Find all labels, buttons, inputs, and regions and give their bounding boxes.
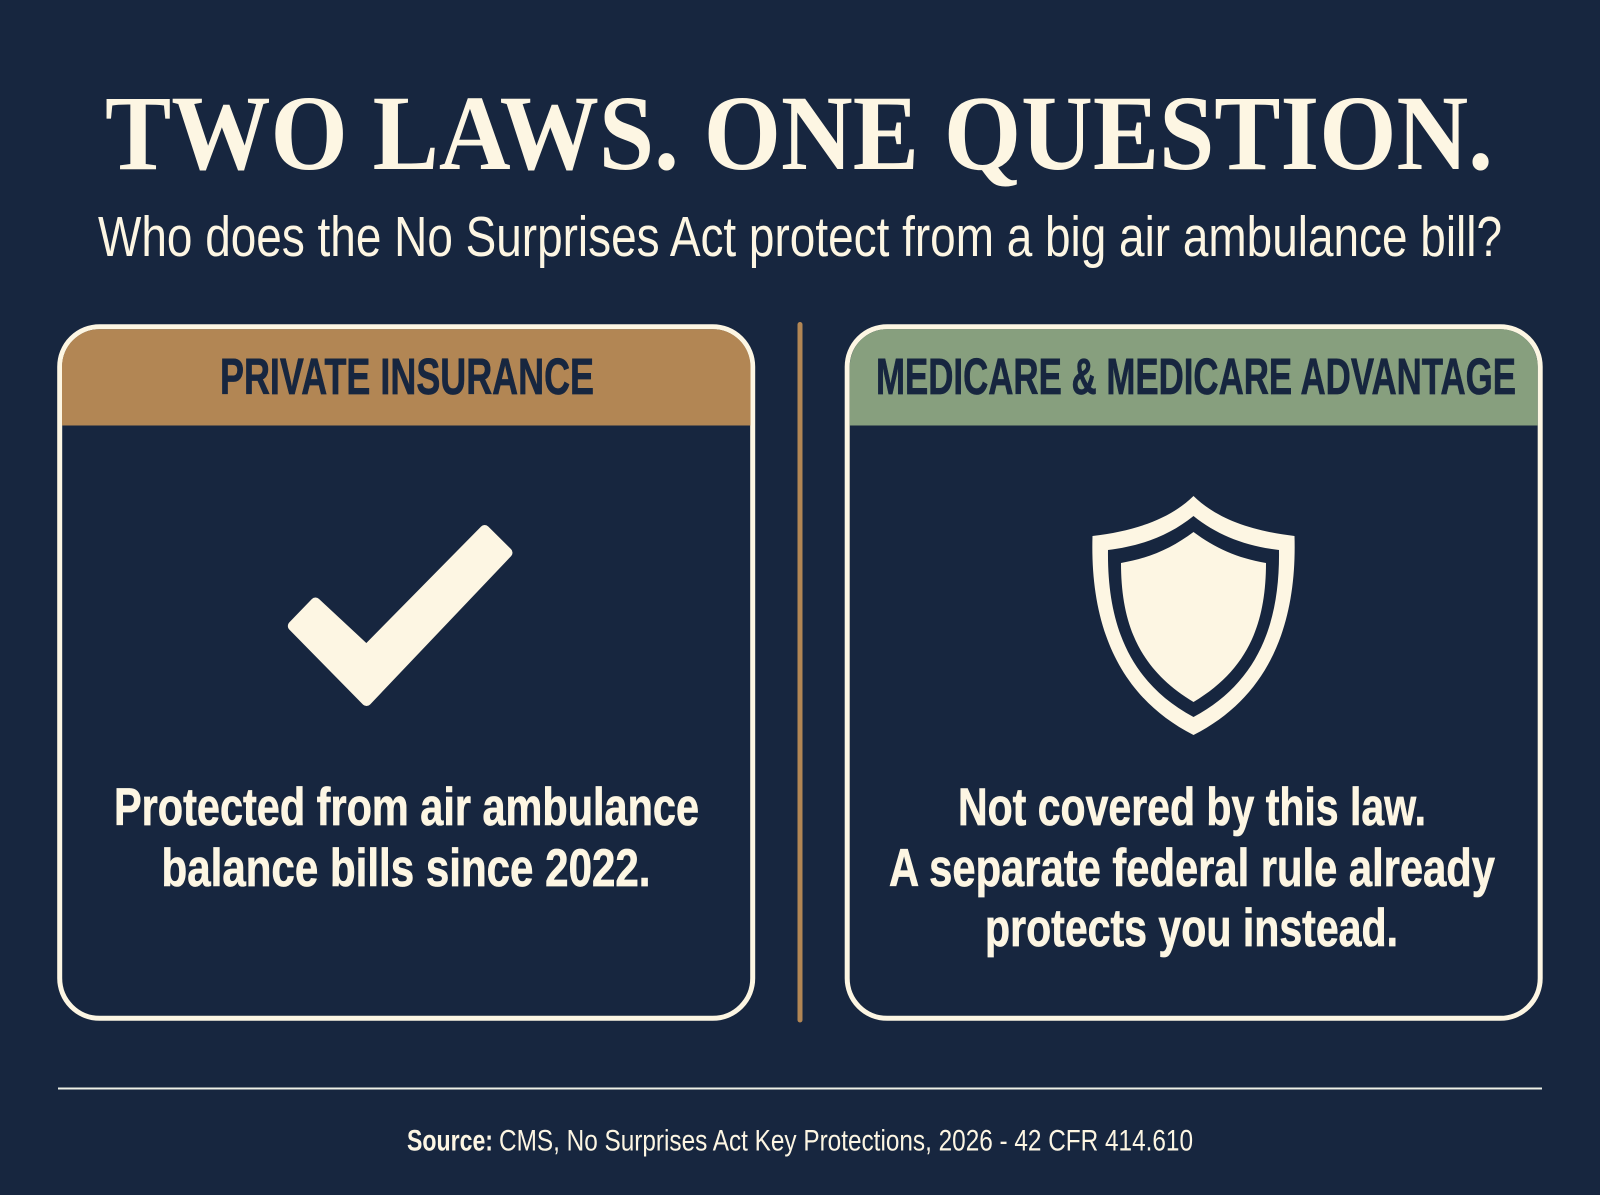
footer rule <box>58 1088 1542 1090</box>
panel header: private insurance: PRIVATE INSURANCE <box>220 348 594 405</box>
text: medicare explanation <box>889 778 1495 958</box>
center divider <box>798 322 802 1022</box>
icon: check mark <box>293 530 508 701</box>
text: private insurance protection <box>114 778 699 898</box>
panel header: medicare <box>850 329 1538 426</box>
text: private insurance protection: balance bills since 2022. <box>162 839 650 898</box>
source line: Source: <box>407 1124 493 1158</box>
panel: medicare and medicare advantage <box>847 327 1540 1018</box>
text: medicare explanation: Not covered by this law. <box>958 778 1426 837</box>
panel: private insurance <box>60 327 753 1018</box>
source line: CMS, No Surprises Act Key Protections, 2026 - 42 CFR 414.610 <box>499 1124 1193 1158</box>
text: medicare explanation: protects you instead. <box>985 899 1398 958</box>
text: private insurance protection: Protected from air ambulance <box>114 778 699 837</box>
panel header: private insurance <box>62 329 750 426</box>
title: TWO LAWS. ONE QUESTION. <box>105 75 1493 193</box>
icon: shield <box>1092 496 1295 735</box>
